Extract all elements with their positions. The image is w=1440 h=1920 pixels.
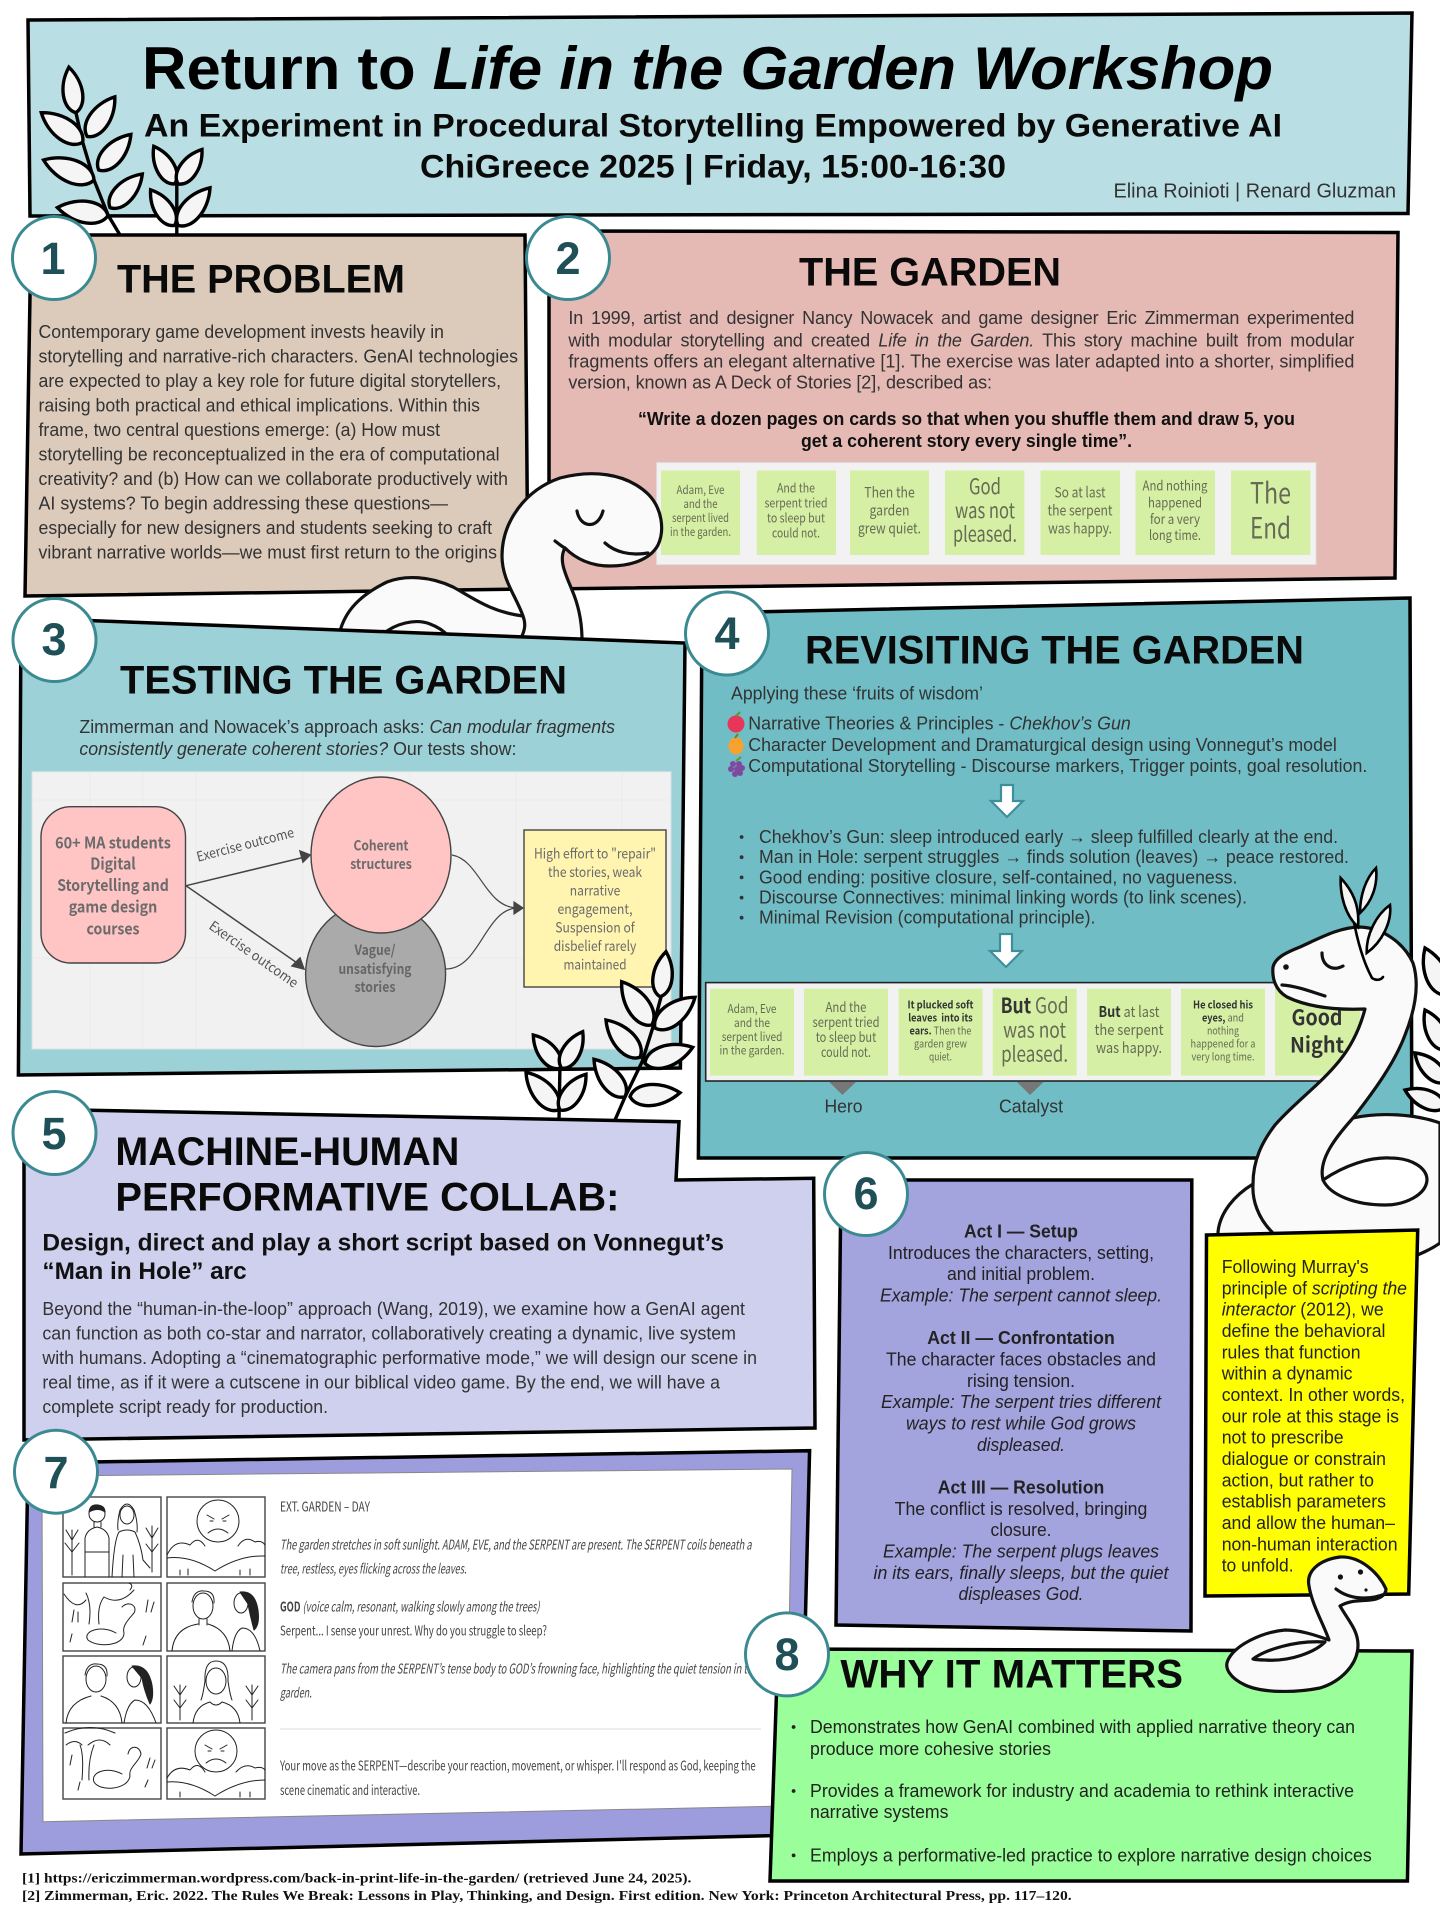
icon: lower large sprig: [586, 950, 701, 1120]
collab body text: [41, 1298, 757, 1417]
card 6: [1136, 470, 1215, 555]
storyboard frame: angry sun two: [167, 1728, 265, 1799]
header panel: [28, 13, 1412, 216]
why it matters bullets: narrative systems: [810, 1801, 948, 1822]
badge 7: 7: [43, 1447, 69, 1498]
icon: top left large sprig: [35, 66, 149, 235]
panel: the garden: [549, 231, 1398, 589]
act three: [874, 1476, 1169, 1604]
storyboard frame: man and woman one: [167, 1583, 265, 1651]
title: Return to Life in the Garden Workshop: [142, 35, 1273, 102]
storyboard frame: worried woman: [167, 1656, 265, 1723]
why it matters bullets: Employs a performative-led practice to explore narrative design choices: [810, 1844, 1372, 1865]
collab body text: can function as both co-star and narrator, collaboratively creating a dynamic, live system: [42, 1323, 736, 1344]
coherent structures node: Coherent: [354, 836, 409, 856]
callout text: context. In other words,: [1222, 1384, 1405, 1405]
act two: The character faces obstacles and: [886, 1348, 1156, 1370]
subtitle: An Experiment in Procedural Storytelling Empowered by Generative AI: [144, 107, 1282, 143]
students node: [41, 807, 186, 963]
coherent structures node: [311, 777, 451, 933]
revised card 6: happened for a: [1190, 1036, 1256, 1052]
revised card 1: Adam, Eve: [728, 1000, 777, 1017]
problem body text: Contemporary game development invests heavily in: [38, 321, 444, 342]
outcome note: disbelief rarely: [554, 936, 637, 956]
badge 4: [686, 592, 768, 675]
card 6: happened: [1148, 491, 1202, 511]
act one: [880, 1221, 1162, 1306]
vague stories node: [306, 902, 446, 1046]
storyboard frame: smiling serpent: [63, 1728, 161, 1799]
revised card 5: [1087, 989, 1171, 1076]
heading: the garden: THE GARDEN: [799, 250, 1061, 294]
act one: Introduces the characters, setting,: [888, 1242, 1154, 1263]
card 5: So at last: [1054, 481, 1106, 502]
collab body text: real time, as if it were a cutscene in our biblical video game. By the end, we will have a: [42, 1372, 721, 1393]
fruits list: Narrative Theories & Principles - Chekhov’s Gun: [748, 713, 1131, 734]
panel: why it matters: [770, 1649, 1412, 1881]
icon: top left small sprig: [143, 142, 218, 235]
badge 8: 8: [774, 1629, 800, 1680]
badge 7: [14, 1430, 98, 1513]
card 6: long time.: [1149, 524, 1201, 544]
outcome note: the stories, weak: [548, 862, 642, 882]
storyboard frame: adam and eve: [63, 1497, 161, 1577]
outcome note: [524, 830, 666, 987]
card 6: And nothing: [1142, 475, 1208, 495]
problem body text: storytelling be reconceptualized in the era of computational: [38, 444, 500, 465]
badge 4: 4: [714, 608, 740, 659]
card 7: [1231, 470, 1310, 555]
act three: in its ears, finally sleeps, but the quiet: [874, 1562, 1169, 1583]
card 2: And the: [777, 477, 815, 496]
badge 3: 3: [41, 614, 67, 665]
badge 8: [746, 1613, 828, 1696]
act one: Example: The serpent cannot sleep.: [880, 1284, 1162, 1306]
testing intro text: consistently generate coherent stories? Our tests show:: [79, 738, 516, 759]
revised card 7: Night: [1290, 1030, 1344, 1060]
callout text: define the behavioral: [1222, 1320, 1386, 1341]
why it matters bullets: [792, 1716, 1372, 1865]
problem body text: vibrant narrative worlds—we must first return to the origins: [38, 542, 497, 563]
outcome note: maintained: [564, 955, 626, 975]
fruits list: [748, 713, 1367, 776]
panel: revisiting the garden: [698, 598, 1412, 1158]
revised card 4: [993, 989, 1077, 1076]
quote: “Write a dozen pages on cards so that when you shuffle them and draw 5, you: [638, 409, 1295, 429]
card 7: End: [1250, 506, 1291, 548]
script text: Serpent... I sense your unrest. Why do you struggle to sleep?: [280, 1620, 547, 1640]
revised card 3: ears. Then the: [910, 1023, 972, 1038]
revised card 3: [899, 989, 983, 1076]
card 5: the serpent: [1048, 500, 1113, 521]
coherent structures node: structures: [350, 854, 412, 874]
badge 5: 5: [41, 1108, 67, 1159]
authors: Elina Roinioti | Renard Gluzman: [1114, 181, 1396, 203]
icon: grapes: [728, 757, 745, 777]
callout text: [1221, 1256, 1407, 1576]
revised card 4: pleased.: [1001, 1039, 1068, 1069]
callout text: not to prescribe: [1222, 1427, 1344, 1448]
heading: why it matters: WHY IT MATTERS: [840, 1652, 1183, 1696]
problem body text: AI systems? To begin addressing these questions—: [38, 493, 448, 514]
garden body text: fragments offers an elegant alternative [1]. The exercise was later adapted into a shorter, simplified: [568, 351, 1354, 371]
heading: machine-human performative collab: [115, 1130, 619, 1220]
badge 6: [824, 1152, 908, 1236]
card 3: [850, 470, 929, 555]
hero marker: Hero: [824, 1096, 862, 1117]
callout text: principle of scripting the: [1222, 1277, 1407, 1298]
outcome note: High effort to "repair": [534, 843, 656, 863]
heading: revisiting the garden: REVISITING THE GARDEN: [805, 628, 1304, 672]
badge 2: [526, 216, 610, 300]
callout text: action, but rather to: [1222, 1469, 1374, 1490]
act three: Example: The serpent plugs leaves: [883, 1540, 1159, 1562]
act two: displeased.: [977, 1434, 1065, 1455]
revised card 5: was happy.: [1096, 1037, 1162, 1058]
testing intro text: Zimmerman and Nowacek’s approach asks: Can modular fragments: [79, 716, 615, 737]
card 3: garden: [870, 500, 910, 521]
card 3: Then the: [864, 481, 915, 502]
card 4: pleased.: [953, 519, 1017, 549]
script text: tree, restless, eyes flicking across the leaves.: [280, 1557, 467, 1577]
panel: storyboard and script: [21, 1451, 810, 1854]
card 2: serpent tried: [764, 492, 828, 511]
revised card 2: [804, 989, 888, 1076]
act three: The conflict is resolved, bringing: [895, 1498, 1147, 1519]
outcome note: Suspension of: [555, 918, 635, 938]
card 1: serpent lived: [672, 510, 729, 526]
callout text: establish parameters: [1222, 1491, 1386, 1512]
revised card 7: [1275, 989, 1360, 1076]
revised card 4: But God: [1001, 990, 1069, 1020]
card 4: was not: [955, 495, 1015, 525]
card 3: grew quiet.: [858, 517, 921, 538]
event line: ChiGreece 2025 | Friday, 15:00-16:30: [420, 148, 1006, 184]
callout text: to unfold.: [1222, 1555, 1294, 1576]
problem body text: especially for new designers and students seeking to craft: [38, 517, 492, 538]
callout text: dialogue or constrain: [1222, 1448, 1386, 1469]
revised card 6: He closed his: [1193, 997, 1253, 1012]
act two: rising tension.: [967, 1370, 1075, 1391]
footnotes: [2] Zimmerman, Eric. 2022. The Rules We Break: Lessons in Play, Thinking, and Design. First edition. New York: Princeton Architectural Press, pp. 117–120.: [22, 1889, 1072, 1904]
students node: 60+ MA students: [55, 829, 171, 853]
script screenshot: [42, 1469, 792, 1822]
card 7: The: [1250, 470, 1291, 512]
collab body text: with humans. Adopting a “cinematographic performative mode,” we will design our scene in: [41, 1347, 757, 1368]
revised card 2: And the: [826, 996, 866, 1016]
curved connectors: [446, 855, 523, 969]
revised card strip: [706, 983, 1366, 1081]
fruits intro: Applying these ‘fruits of wisdom’: [731, 682, 983, 704]
icon: apple: [728, 712, 744, 732]
callout text: Following Murray's: [1222, 1256, 1369, 1277]
students node: courses: [86, 915, 140, 939]
revised card 1: [710, 989, 794, 1076]
revised card 5: the serpent: [1094, 1019, 1164, 1040]
storyboard frame: angry sun one: [167, 1497, 265, 1577]
footnotes: [1] https://ericzimmerman.wordpress.com/back-in-print-life-in-the-garden/ (retrieved June 24, 2025).: [22, 1872, 691, 1887]
subheading: Design, direct and play a short script based on Vonnegut’s: [42, 1230, 724, 1257]
card 4: [945, 470, 1024, 555]
hero marker: [824, 1082, 862, 1117]
problem body text: [38, 321, 518, 563]
illustration: small smiling serpent: [1227, 1557, 1386, 1691]
principles list: Chekhov’s Gun: sleep introduced early → sleep fulfilled clearly at the end.: [759, 826, 1338, 847]
panel: testing the garden: [18, 618, 685, 1075]
principles list: Minimal Revision (computational principle).: [759, 907, 1095, 928]
revised card 6: very long time.: [1192, 1050, 1255, 1064]
icon: right edge sprig: [1401, 944, 1440, 1115]
subheading: “Man in Hole” arc: [42, 1258, 247, 1285]
illustration: sleeping serpent: [338, 474, 662, 640]
revised card 3: leaves into its: [908, 1010, 973, 1025]
act two: ways to rest while God grows: [906, 1412, 1136, 1434]
heading: testing the garden: TESTING THE GARDEN: [120, 658, 567, 702]
outcome note: narrative: [570, 880, 620, 900]
garden body text: [567, 308, 1354, 393]
badge 5: [13, 1092, 96, 1174]
panel: the problem: [25, 235, 528, 596]
revised card 3: garden grew: [914, 1036, 968, 1052]
story card strip: [657, 463, 1316, 565]
problem body text: raising both practical and ethical implications. Within this: [38, 395, 480, 416]
footnotes: [22, 1872, 1072, 1904]
why it matters bullets: Provides a framework for industry and academia to rethink interactive: [810, 1780, 1354, 1801]
revised card 5: But at last: [1098, 1001, 1160, 1022]
principles list: Good ending: positive closure, self-contained, no vagueness.: [759, 866, 1237, 887]
act three: displeases God.: [958, 1583, 1084, 1604]
act one: Act I — Setup: [964, 1221, 1078, 1242]
problem body text: creativity? and (b) How can we collaborate productively with: [38, 468, 508, 489]
card 1: Adam, Eve: [676, 482, 724, 498]
act three: Act III — Resolution: [938, 1476, 1104, 1498]
garden body text: In 1999, artist and designer Nancy Nowacek and game designer Eric Zimmerman experimented: [568, 308, 1354, 328]
subheading: [42, 1230, 724, 1285]
catalyst marker: Catalyst: [999, 1096, 1063, 1117]
revised card 4: was not: [1003, 1015, 1066, 1045]
revised card 6: nothing: [1207, 1023, 1239, 1038]
principles list: [740, 826, 1349, 928]
card 5: [1040, 470, 1120, 555]
catalyst marker: [999, 1082, 1063, 1117]
script text: Your move as the SERPENT—describe your reaction, movement, or whisper. I'll respond as God, keeping the: [279, 1755, 756, 1775]
why it matters bullets: Demonstrates how GenAI combined with applied narrative theory can: [810, 1716, 1355, 1737]
act two: Act II — Confrontation: [927, 1327, 1115, 1348]
quote: [638, 409, 1295, 451]
arrow down 2: [990, 934, 1022, 967]
vague stories node: unsatisfying: [338, 959, 412, 979]
heading: machine-human performative collab: MACHINE-HUMAN: [115, 1130, 459, 1174]
arrow down 1: [991, 785, 1023, 817]
icon: orange: [728, 734, 744, 754]
callout text: non-human interaction: [1222, 1533, 1398, 1554]
revised card 3: It plucked soft: [908, 997, 974, 1012]
revised card 6: eyes, and: [1202, 1010, 1244, 1025]
script text: The camera pans from the SERPENT’s tense body to GOD’s frowning face, highlighting the quiet tension in the: [280, 1657, 759, 1677]
card 1: [661, 470, 740, 555]
badge 6: 6: [853, 1168, 879, 1219]
revised card 1: in the garden.: [720, 1042, 784, 1059]
card 1: and the: [684, 496, 718, 512]
arrow label upper: Exercise outcome: [194, 821, 296, 866]
card 2: to sleep but: [767, 507, 825, 526]
heading: machine-human performative collab: PERFORMATIVE COLLAB:: [115, 1176, 619, 1220]
garden body text: with modular storytelling and created Life in the Garden. This story machine built from modular: [567, 330, 1354, 350]
badge 1: [12, 216, 96, 300]
panel: act structure: [836, 1180, 1192, 1631]
revised card 1: serpent lived: [722, 1028, 782, 1045]
script text: The garden stretches in soft sunlight. ADAM, EVE, and the SERPENT are present. The SERPENT coils beneath a: [280, 1533, 753, 1553]
revised card 2: to sleep but: [816, 1026, 876, 1046]
garden body text: version, known as A Deck of Stories [2], described as:: [568, 373, 992, 393]
act two: [881, 1327, 1162, 1455]
script text: scene cinematic and interactive.: [280, 1779, 420, 1799]
badge 1: 1: [40, 233, 66, 284]
script text: garden.: [280, 1682, 312, 1702]
badge 2: 2: [555, 233, 581, 284]
outcome note: engagement,: [558, 899, 633, 919]
script text: EXT. GARDEN – DAY: [280, 1496, 371, 1516]
problem body text: are expected to play a key role for future digital storytellers,: [38, 370, 501, 391]
revised card 2: serpent tried: [812, 1011, 880, 1031]
testing intro text: [79, 716, 615, 759]
card 4: God: [969, 471, 1001, 501]
fruits list: Computational Storytelling - Discourse markers, Trigger points, goal resolution.: [748, 755, 1367, 776]
students node: game design: [69, 894, 157, 918]
flow diagram: [32, 772, 671, 1049]
callout text: within a dynamic: [1221, 1363, 1352, 1384]
heading: the problem: THE PROBLEM: [117, 258, 405, 302]
vague stories node: Vague/: [354, 940, 396, 960]
students node: Storytelling and: [57, 872, 169, 896]
collab body text: Beyond the “human-in-the-loop” approach (Wang, 2019), we examine how a GenAI agent: [42, 1298, 745, 1319]
revised card 2: could not.: [821, 1041, 871, 1061]
card 5: was happy.: [1048, 517, 1112, 538]
principles list: Man in Hole: serpent struggles → finds solution (leaves) → peace restored.: [759, 846, 1349, 867]
quote: get a coherent story every single time”.: [801, 431, 1132, 451]
revised card 3: quiet.: [929, 1050, 952, 1064]
card 2: could not.: [772, 522, 820, 541]
principles list: Discourse Connectives: minimal linking words (to link scenes).: [759, 887, 1247, 908]
callout text: our role at this stage is: [1222, 1405, 1399, 1426]
panel: murray callout: [1205, 1230, 1418, 1596]
collab body text: complete script ready for production.: [42, 1396, 328, 1417]
arrow label lower: Exercise outcome: [206, 915, 303, 992]
callout text: rules that function: [1222, 1341, 1360, 1362]
students node: Digital: [90, 851, 136, 875]
revised card 1: and the: [734, 1014, 770, 1031]
act two: Example: The serpent tries different: [881, 1391, 1162, 1412]
callout text: interactor (2012), we: [1222, 1299, 1384, 1320]
script text: [279, 1496, 761, 1799]
arrows from students: [186, 851, 310, 969]
storyboard frame: serpent under tree: [63, 1583, 161, 1651]
fruits list: Character Development and Dramaturgical design using Vonnegut’s model: [748, 734, 1337, 755]
act one: and initial problem.: [947, 1263, 1095, 1284]
revised card 7: Good: [1292, 1002, 1342, 1032]
revised card 6: [1181, 989, 1265, 1076]
head sprig: [1341, 868, 1390, 980]
callout text: and allow the human–: [1222, 1512, 1396, 1533]
script text: GOD (voice calm, resonant, walking slowly among the trees): [280, 1596, 541, 1616]
vague stories node: stories: [354, 977, 396, 997]
storyboard frame: man and woman two: [63, 1656, 161, 1723]
card 2: [757, 470, 836, 555]
problem body text: frame, two central questions emerge: (a) How must: [38, 419, 440, 440]
problem body text: storytelling and narrative-rich characters. GenAI technologies: [38, 346, 518, 367]
panel: machine-human collab: [24, 1109, 815, 1440]
card 1: in the garden.: [670, 524, 731, 540]
illustration: large serpent with leaves: [1218, 868, 1440, 1258]
icon: lower small sprig: [518, 1027, 593, 1120]
card 6: for a very: [1150, 508, 1200, 528]
badge 3: [13, 598, 96, 682]
act three: closure.: [990, 1519, 1052, 1540]
why it matters bullets: produce more cohesive stories: [810, 1738, 1051, 1759]
